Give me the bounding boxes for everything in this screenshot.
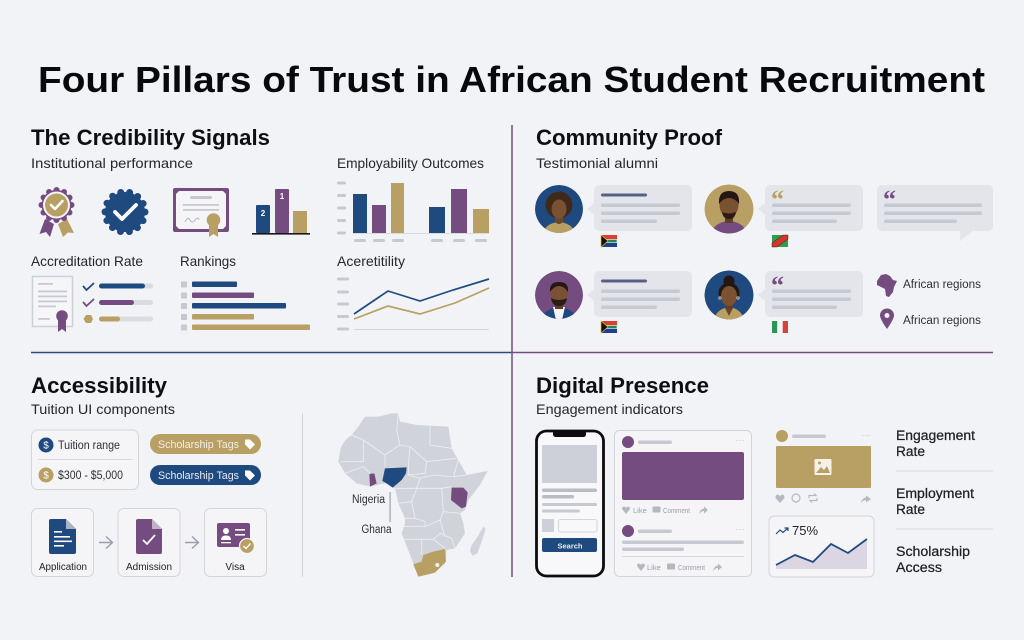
testimonial 2 (704, 184, 863, 247)
social feed card: Comment (663, 506, 691, 515)
speech bubble: standalone quote (877, 185, 993, 241)
panel: Community Proof (535, 125, 993, 333)
country: Ghana (369, 473, 377, 487)
country: Nigeria (382, 467, 407, 488)
phone mockup (536, 431, 604, 576)
avatar: man on purple (535, 271, 583, 320)
social feed card: Like (633, 506, 647, 515)
chart: accreditation progress bars (83, 283, 153, 323)
phone mockup: Search (557, 542, 583, 550)
testimonial 3 (535, 271, 692, 333)
label: Ghana: Ghana (362, 524, 392, 536)
tag: gold scholarship pill (150, 434, 261, 454)
metric: Employment Rate: Rate (896, 502, 925, 517)
flag: Italy style tricolour (772, 321, 788, 333)
label: African regions: African regions (903, 279, 981, 291)
card: tuition range: $ (43, 440, 49, 452)
country: Kenya (451, 488, 468, 508)
speech bubble: “ (771, 271, 784, 300)
testimonial 4 (704, 270, 863, 333)
metric: Scholarship Access: Scholarship (896, 544, 970, 559)
heading: Community Proof: Community Proof (536, 125, 723, 150)
step: Visa: Visa (225, 562, 245, 573)
social feed card: ··· (736, 524, 744, 534)
social feed card: ··· (736, 435, 744, 445)
heading: The Credibility Signals: The Credibility Signals (31, 125, 270, 150)
icon: navy check seal (105, 192, 145, 232)
panel: Accessibility (31, 373, 488, 577)
metric: Employment Rate: Employment (896, 486, 974, 501)
avatar: woman on navy (535, 185, 583, 233)
heading: Digital Presence: Digital Presence (536, 373, 709, 398)
card: 75% trend chart: 75% (792, 523, 818, 538)
tag: navy scholarship pill (150, 465, 261, 485)
icon: accreditation document (32, 276, 72, 332)
metric: Scholarship Access: Access (896, 560, 942, 575)
metric: Scholarship Access (896, 544, 970, 575)
title: Four Pillars of Trust in African Student Recruitment (38, 59, 985, 100)
social feed card: Comment (678, 563, 706, 572)
chart: podium bars (252, 189, 310, 235)
icon: Africa silhouette (877, 274, 897, 297)
icon: map pin (880, 308, 894, 329)
arrow (185, 536, 198, 548)
icon: certificate (173, 188, 229, 237)
label: Accreditation Rate: Accreditation Rate (31, 253, 143, 269)
subheading: Institutional performance: Institutional performance (31, 155, 193, 171)
speech bubble (758, 185, 863, 231)
subheading: Tuition UI components: Tuition UI components (31, 401, 175, 417)
chart: employability bars (337, 182, 489, 242)
metric: Engagement Rate: Rate (896, 444, 925, 459)
map outline with country borders (338, 413, 488, 577)
leader line (390, 492, 391, 522)
card: tuition range: $ (43, 470, 49, 482)
flag: South Africa (601, 235, 617, 247)
testimonial 1 (535, 185, 692, 247)
label: Nigeria: Nigeria (352, 494, 386, 506)
label: Rankings: Rankings (180, 253, 236, 269)
avatar: man on gold (704, 184, 754, 234)
metric: Engagement Rate: Engagement (896, 428, 975, 443)
step: Application (32, 508, 94, 576)
panel: The Credibility Signals (31, 125, 489, 332)
label: African regions: African regions (903, 315, 981, 327)
card: tuition range (32, 430, 138, 490)
social feed card: Like (647, 563, 661, 572)
heading: Accessibility: Accessibility (31, 373, 168, 398)
speech bubble (758, 271, 863, 317)
step: Visa (204, 508, 266, 576)
social feed card (614, 430, 752, 576)
panel: Digital Presence (536, 373, 993, 577)
speech bubble: “ (771, 185, 784, 214)
country: South Africa (413, 549, 446, 577)
icon: award rosette (40, 190, 74, 237)
flag: South Africa (601, 321, 617, 333)
metric: Engagement Rate (896, 428, 975, 459)
subheading: Testimonial alumni: Testimonial alumni (536, 155, 658, 171)
gold image post: ··· (862, 430, 870, 440)
chart: line chart (337, 278, 489, 330)
avatar: woman on navy with bun (704, 270, 754, 320)
card: tuition range: Tuition range (58, 440, 120, 452)
tag: navy scholarship pill: Scholarship Tags (158, 470, 239, 482)
tag: gold scholarship pill: Scholarship Tags (158, 439, 239, 451)
chart: podium bars: 1 (280, 192, 285, 201)
chart: rankings horizontal bars (181, 282, 310, 330)
speech bubble (587, 185, 692, 231)
speech bubble (587, 271, 692, 317)
speech bubble: standalone quote: “ (883, 185, 896, 214)
step: Admission: Admission (126, 562, 172, 573)
chart: podium bars: 2 (261, 209, 266, 218)
card: 75% trend chart (769, 516, 874, 577)
gold image post (776, 430, 871, 503)
step: Application: Application (39, 562, 87, 573)
label: Aceretitility: Aceretitility (337, 253, 405, 269)
metric: Employment Rate (896, 486, 974, 517)
flag: Tanzania style (772, 235, 788, 247)
arrow (99, 536, 112, 548)
step: Admission (118, 508, 180, 576)
map: Africa (338, 413, 488, 577)
label: Employability Outcomes: Employability Outcomes (337, 155, 484, 171)
subheading: Engagement indicators: Engagement indicators (536, 401, 683, 417)
card: tuition range: $300 - $5,000 (58, 470, 123, 482)
